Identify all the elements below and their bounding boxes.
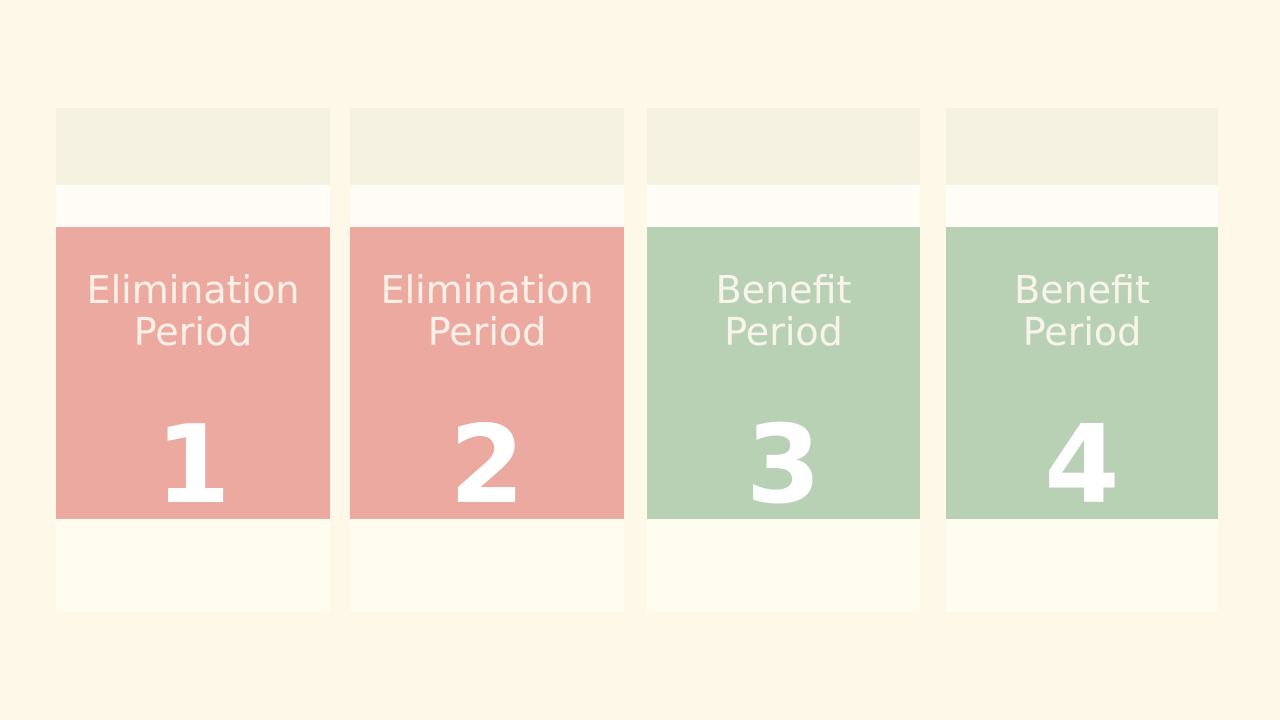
column 4 <box>946 185 1218 612</box>
panel: benefit period 4: Benefit <box>1014 268 1150 312</box>
panel: benefit period 4: Period <box>1023 310 1141 354</box>
column 3 <box>647 185 920 612</box>
panel: benefit period 3: 3 <box>746 403 821 528</box>
panel: benefit period 3 <box>647 227 920 519</box>
panel: benefit period 3: Period <box>724 310 843 354</box>
panel: elimination period 1: 1 <box>155 403 231 528</box>
panel: elimination period 2: Period <box>428 310 546 354</box>
column 2 <box>350 185 624 612</box>
panel: elimination period 1: Elimination <box>87 268 299 312</box>
panel: benefit period 4 <box>946 227 1218 519</box>
panel: elimination period 2: 2 <box>449 403 525 528</box>
panel: benefit period 4: 4 <box>1044 403 1120 528</box>
panel: elimination period 2: Elimination <box>381 268 593 312</box>
panel: benefit period 3: Benefit <box>716 268 851 312</box>
panel: elimination period 1 <box>56 227 330 519</box>
column 1 <box>56 185 330 612</box>
panel: elimination period 2 <box>350 227 624 519</box>
panel: elimination period 1: Period <box>134 310 252 354</box>
